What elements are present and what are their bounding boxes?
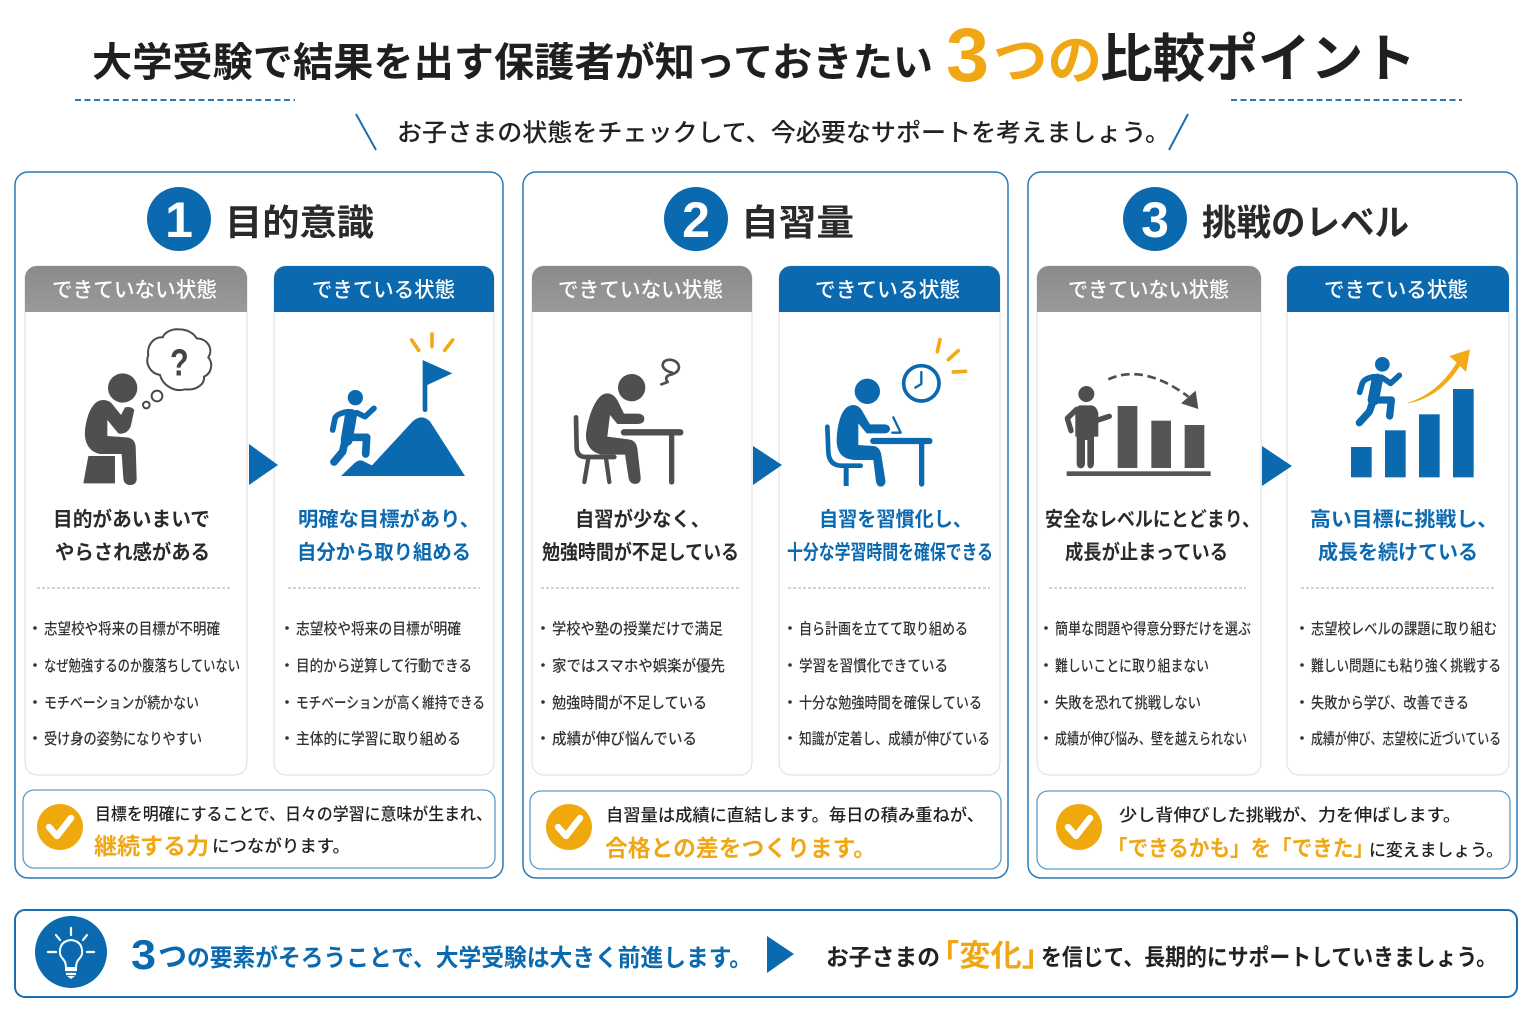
checklist: 成績が伸び悩んでいる xyxy=(552,729,697,748)
title: 3 xyxy=(946,13,989,98)
subtitle xyxy=(356,114,1188,150)
checklist: モチベーションが続かない xyxy=(44,693,199,712)
checklist xyxy=(285,619,485,748)
arrow xyxy=(1262,446,1292,486)
statement xyxy=(1310,508,1498,564)
panel: 挑戦のレベル xyxy=(1028,172,1517,878)
closing message: お子さまの xyxy=(826,944,940,970)
statement: 自習が少なく、 xyxy=(575,507,710,531)
checklist xyxy=(1300,620,1501,748)
subtitle: お子さまの状態をチェックして、今必要なサポートを考えましょう。 xyxy=(397,119,1170,147)
statement: 成長を続けている xyxy=(1318,540,1478,564)
number badge 2: 2 xyxy=(682,192,710,248)
card: できている状態 xyxy=(274,266,494,775)
title: つの xyxy=(993,31,1102,91)
icon: light bulb xyxy=(35,916,107,988)
number badge 3: 3 xyxy=(1141,192,1169,248)
icon: slumped student xyxy=(576,360,680,484)
callout: 少し背伸びした挑戦が、力を伸ばします。 xyxy=(1119,805,1461,825)
icon: check xyxy=(546,804,592,850)
arrow xyxy=(249,444,278,485)
checklist: 志望校レベルの課題に取り組む xyxy=(1311,620,1497,638)
title: 比較ポイント xyxy=(1100,31,1416,89)
checklist: 失敗から学び、改善できる xyxy=(1311,694,1469,712)
card: できている状態 xyxy=(779,266,1000,775)
statement: やらされ感がある xyxy=(55,540,210,564)
arrow xyxy=(767,936,794,973)
icon: thinking person: ? xyxy=(170,341,189,384)
card: できていない状態: できていない状態 xyxy=(52,279,217,302)
summary text: つ xyxy=(158,941,187,974)
statement: 自分から取り組める xyxy=(297,541,471,564)
checklist: 難しいことに取り組まない xyxy=(1055,657,1209,675)
statement: 安全なレベルにとどまり、 xyxy=(1045,508,1260,531)
number badge 3 xyxy=(1123,187,1187,251)
checklist: 十分な勉強時間を確保している xyxy=(799,693,982,712)
checklist xyxy=(1044,619,1251,748)
card: できていない状態 xyxy=(25,266,247,775)
card: できていない状態: できていない状態 xyxy=(1068,279,1229,302)
checklist: モチベーションが高く維持できる xyxy=(296,693,485,712)
statement: 勉強時間が不足している xyxy=(542,540,739,564)
card: できている状態 xyxy=(1287,266,1509,775)
card: できていない状態 xyxy=(532,266,752,775)
callout xyxy=(1037,791,1510,869)
checklist: 勉強時間が不足している xyxy=(552,693,707,712)
arrow xyxy=(753,446,782,485)
card: できている状態: できている状態 xyxy=(1324,279,1468,302)
checklist: 自ら計画を立てて取り組める xyxy=(799,620,968,638)
checklist: 知識が定着し、成績が伸びている xyxy=(799,729,990,748)
checklist: 家ではスマホや娯楽が優先 xyxy=(552,656,725,675)
icon: check xyxy=(1056,804,1102,850)
panel: 自習量 xyxy=(523,172,1008,878)
callout: 目標を明確にすることで、日々の学習に意味が生まれ、 xyxy=(95,804,492,824)
summary text: の要素がそろうことで、大学受験は大きく前進します。 xyxy=(187,944,752,972)
callout xyxy=(530,791,1001,869)
checklist: 志望校や将来の目標が明確 xyxy=(296,619,461,638)
checklist: 志望校や将来の目標が不明確 xyxy=(44,619,220,638)
number badge 1: 1 xyxy=(165,192,193,248)
callout: に変えましょう。 xyxy=(1369,841,1503,860)
statement: 明確な目標があり、 xyxy=(298,507,480,531)
checklist: 成績が伸び悩み、壁を越えられない xyxy=(1055,729,1247,748)
callout xyxy=(23,790,495,868)
summary text: 3 xyxy=(131,931,156,978)
icon: runner on rising bars xyxy=(1351,349,1474,477)
statement: 成長が止まっている xyxy=(1065,540,1228,564)
summary text xyxy=(131,931,752,978)
card: できている状態: できている状態 xyxy=(312,279,455,302)
checklist: 学校や塾の授業だけで満足 xyxy=(552,620,723,638)
number badge 1 xyxy=(147,187,211,251)
statement xyxy=(1045,508,1260,564)
number badge 2 xyxy=(664,187,728,251)
icon: person with falling bars xyxy=(1067,374,1211,476)
closing message: を信じて、長期的にサポートしていきましょう。 xyxy=(1041,944,1497,970)
icon: check xyxy=(37,804,83,850)
closing message: 「変化」 xyxy=(928,940,1053,973)
icon: climbing to flag xyxy=(333,334,465,476)
statement xyxy=(297,507,480,564)
statement: 自習を習慣化し、 xyxy=(819,508,972,531)
statement: 十分な学習時間を確保できる xyxy=(787,541,993,564)
statement: 目的があいまいで xyxy=(53,507,210,531)
callout: につながります。 xyxy=(212,836,350,856)
checklist: 学習を習慣化できている xyxy=(799,657,948,675)
callout: 合格との差をつくります。 xyxy=(605,835,876,861)
icon: studying with clock xyxy=(827,340,966,487)
card: できている状態: できている状態 xyxy=(815,279,960,302)
card: できていない状態: できていない状態 xyxy=(558,279,723,302)
checklist: 主体的に学習に取り組める xyxy=(296,730,461,748)
statement: 高い目標に挑戦し、 xyxy=(1310,508,1498,531)
title: 大学受験で結果を出す保護者が知っておきたい xyxy=(92,41,933,85)
checklist xyxy=(541,620,725,748)
checklist: 簡単な問題や得意分野だけを選ぶ xyxy=(1055,619,1251,638)
title xyxy=(92,13,1416,98)
statement xyxy=(53,507,210,564)
heading: 挑戦のレベル: 挑戦のレベル xyxy=(1202,202,1409,243)
callout: 「できるかも」を「できた」 xyxy=(1107,836,1374,861)
checklist: 受け身の姿勢になりやすい xyxy=(44,729,202,748)
banner: summary xyxy=(15,910,1517,997)
statement xyxy=(787,508,993,564)
checklist: 失敗を恐れて挑戦しない xyxy=(1055,694,1201,712)
closing message xyxy=(826,940,1497,973)
checklist: 目的から逆算して行動できる xyxy=(296,656,472,675)
statement xyxy=(542,507,739,564)
checklist: なぜ勉強するのか腹落ちしていない xyxy=(44,656,240,675)
callout: 自習量は成績に直結します。毎日の積み重ねが、 xyxy=(606,805,984,825)
icon: thinking person xyxy=(83,329,211,485)
card: できていない状態 xyxy=(1037,266,1261,775)
checklist xyxy=(788,620,990,748)
heading: 目的意識: 目的意識 xyxy=(225,202,374,243)
panel: 目的意識 xyxy=(15,172,503,878)
heading: 自習量: 自習量 xyxy=(741,202,854,243)
checklist xyxy=(33,619,240,748)
callout: 継続する力 xyxy=(94,833,209,859)
